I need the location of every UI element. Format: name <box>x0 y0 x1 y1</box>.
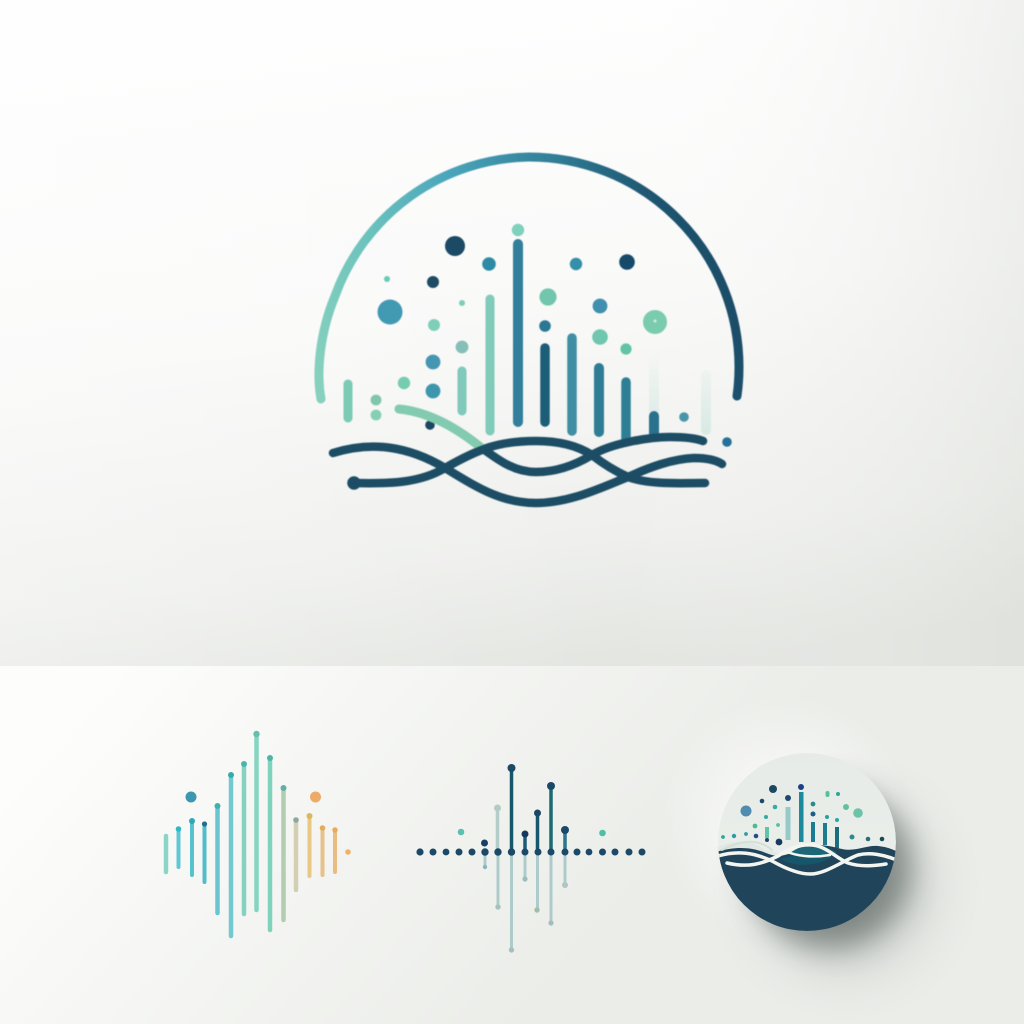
arc: enclosing circle <box>319 157 739 399</box>
woven water waves <box>333 437 722 503</box>
reflected stems <box>483 852 568 953</box>
waveform bars <box>166 735 335 936</box>
main emblem <box>319 157 739 503</box>
badge: round emblem button <box>714 748 944 984</box>
white woven waves <box>718 842 894 874</box>
navy lower body <box>716 845 898 935</box>
icon: audio waveform bars <box>166 731 351 936</box>
icon: mirrored lollipop pulse line <box>416 764 646 953</box>
upward stems <box>498 768 565 852</box>
data bars <box>348 244 654 442</box>
badge face <box>716 753 898 935</box>
curved green stroke <box>399 409 484 450</box>
lollipop heads <box>458 764 606 846</box>
lighter teal lens shapes between waves <box>792 846 837 855</box>
floating dots <box>371 224 732 447</box>
background: upper paper panel <box>0 0 1024 666</box>
background: lower paper panel <box>0 666 1024 1024</box>
mini bars and dots <box>721 784 884 848</box>
badge glow <box>660 695 910 945</box>
waveform dots <box>176 731 351 855</box>
badge drop shadow <box>747 784 925 965</box>
dotted baseline <box>416 848 646 856</box>
pale crest under the bars <box>718 842 784 856</box>
faded ghost bars <box>654 360 706 430</box>
